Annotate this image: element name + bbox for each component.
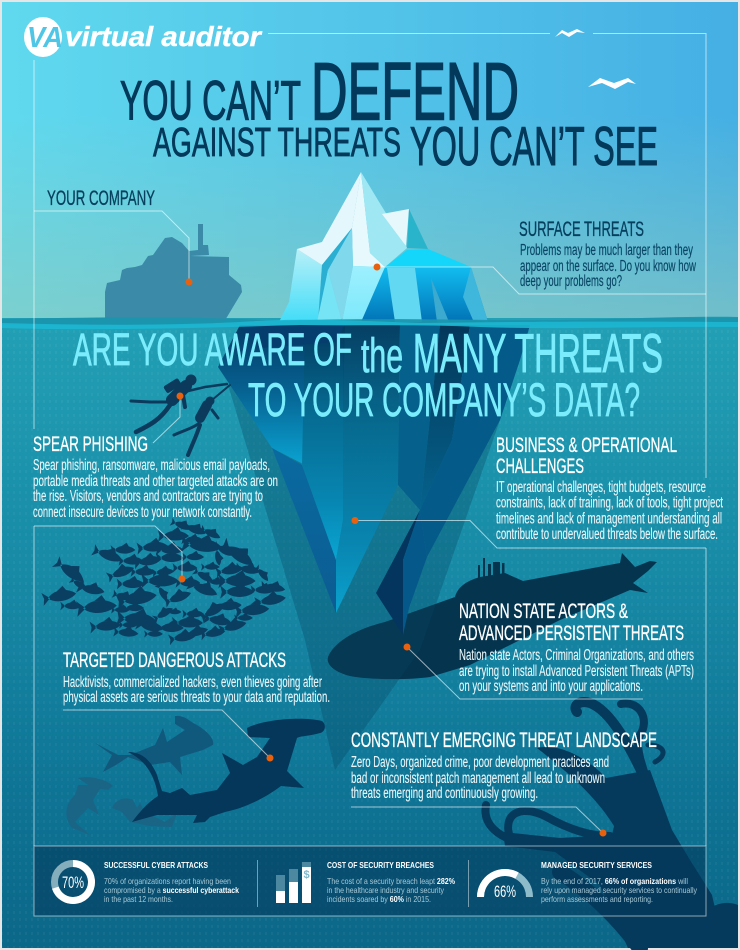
- icon: small bird: [555, 29, 585, 37]
- stat: successful cyber attacks: [54, 860, 239, 904]
- callout: spear phishing: [33, 392, 278, 521]
- callout: business and operational challenges: CHALLENGES: [496, 455, 584, 478]
- logo: virtual auditor: VA: [27, 22, 63, 54]
- callout: your company: [34, 187, 192, 286]
- logo: virtual auditor: [24, 17, 263, 57]
- icon: kraken silhouette: [485, 702, 738, 948]
- subtitle: are you aware: the: [361, 330, 403, 383]
- icon: large bird: [588, 78, 636, 89]
- stat: successful cyber attacks: 70%: [62, 873, 84, 892]
- iceberg above water: [278, 172, 488, 324]
- callout: spear phishing: portable media threats and other targeted attacks are on: [33, 473, 278, 490]
- callout: constantly emerging threat landscape: threats emerging and continuously growing.: [351, 785, 538, 802]
- submarine silhouette: [328, 553, 657, 679]
- callout: surface threats: [374, 218, 706, 294]
- frame lines: [34, 34, 706, 846]
- icon: cargo ship silhouette: [105, 224, 242, 322]
- callout: nation state actors: NATION STATE ACTORS &: [459, 600, 628, 623]
- callout: nation state actors: [404, 600, 694, 699]
- icon: divers: [131, 374, 230, 455]
- callout: spear phishing: Spear phishing, ransomware, malicious email payloads,: [33, 457, 270, 474]
- callout: targeted dangerous attacks: Hacktivists, commercialized hackers, even thieves going after: [63, 674, 322, 691]
- title: AGAINST THREATS: [153, 119, 401, 165]
- stat: managed security services: By the end of 2017, 66% of organizations will: [541, 877, 688, 886]
- callout: business and operational challenges: [352, 434, 723, 548]
- stat: successful cyber attacks: SUCCESSFUL CYBER ATTACKS: [104, 860, 208, 870]
- stat: cost of security breaches: The cost of a security breach leapt 282%: [327, 877, 456, 886]
- stat: successful cyber attacks: in the past 12 months.: [104, 895, 173, 904]
- callout: spear phishing: connect insecure devices to your network constantly.: [33, 504, 252, 521]
- callout: spear phishing: the rise. Visitors, vendors and contractors are trying to: [33, 488, 263, 505]
- callout: surface threats: SURFACE THREATS: [519, 218, 644, 241]
- iceberg shadow beam: [228, 385, 500, 770]
- stat: cost of security breaches: incidents soared by 60% in 2015.: [327, 895, 431, 904]
- callout: targeted dangerous attacks: TARGETED DANGEROUS ATTACKS: [63, 649, 286, 672]
- callout: targeted dangerous attacks: [63, 649, 330, 762]
- title: YOU CAN’T: [120, 68, 301, 132]
- stat: cost of security breaches: [276, 860, 456, 904]
- callout: constantly emerging threat landscape: [351, 729, 657, 836]
- stat: managed security services: 66%: [494, 882, 516, 901]
- subtitle: are you aware: [73, 322, 663, 426]
- stat: managed security services: rely upon managed security services to continually: [541, 886, 698, 895]
- callout: spear phishing: SPEAR PHISHING: [33, 433, 148, 456]
- callout: your company: YOUR COMPANY: [47, 187, 155, 210]
- stat: managed security services: [480, 860, 698, 904]
- title: [120, 46, 658, 177]
- callout: surface threats: deep your problems go?: [520, 273, 622, 290]
- stat: cost of security breaches: $: [303, 869, 310, 881]
- stat: cost of security breaches: COST OF SECURITY BREACHES: [327, 860, 434, 870]
- iceberg below water: [218, 325, 530, 635]
- stat: cost of security breaches: in the healthcare industry and security: [327, 886, 445, 895]
- panel: statistics: [34, 846, 706, 916]
- stat: managed security services: perform assessments and reporting.: [541, 895, 653, 904]
- stat: successful cyber attacks: compromised by a successful cyberattack: [104, 886, 239, 895]
- logo: virtual auditor: virtual auditor: [65, 21, 263, 52]
- stat: successful cyber attacks: 70% of organizations report having been: [104, 877, 231, 886]
- water surface band: [2, 317, 738, 329]
- sharks: [66, 716, 325, 835]
- subtitle: are you aware: ARE YOU AWARE OF: [73, 324, 352, 375]
- fish school: [34, 516, 287, 645]
- callout: targeted dangerous attacks: physical assets are serious threats to your data and reputation.: [63, 689, 330, 706]
- stat: managed security services: MANAGED SECURITY SERVICES: [541, 860, 652, 870]
- title: DEFEND: [311, 46, 519, 138]
